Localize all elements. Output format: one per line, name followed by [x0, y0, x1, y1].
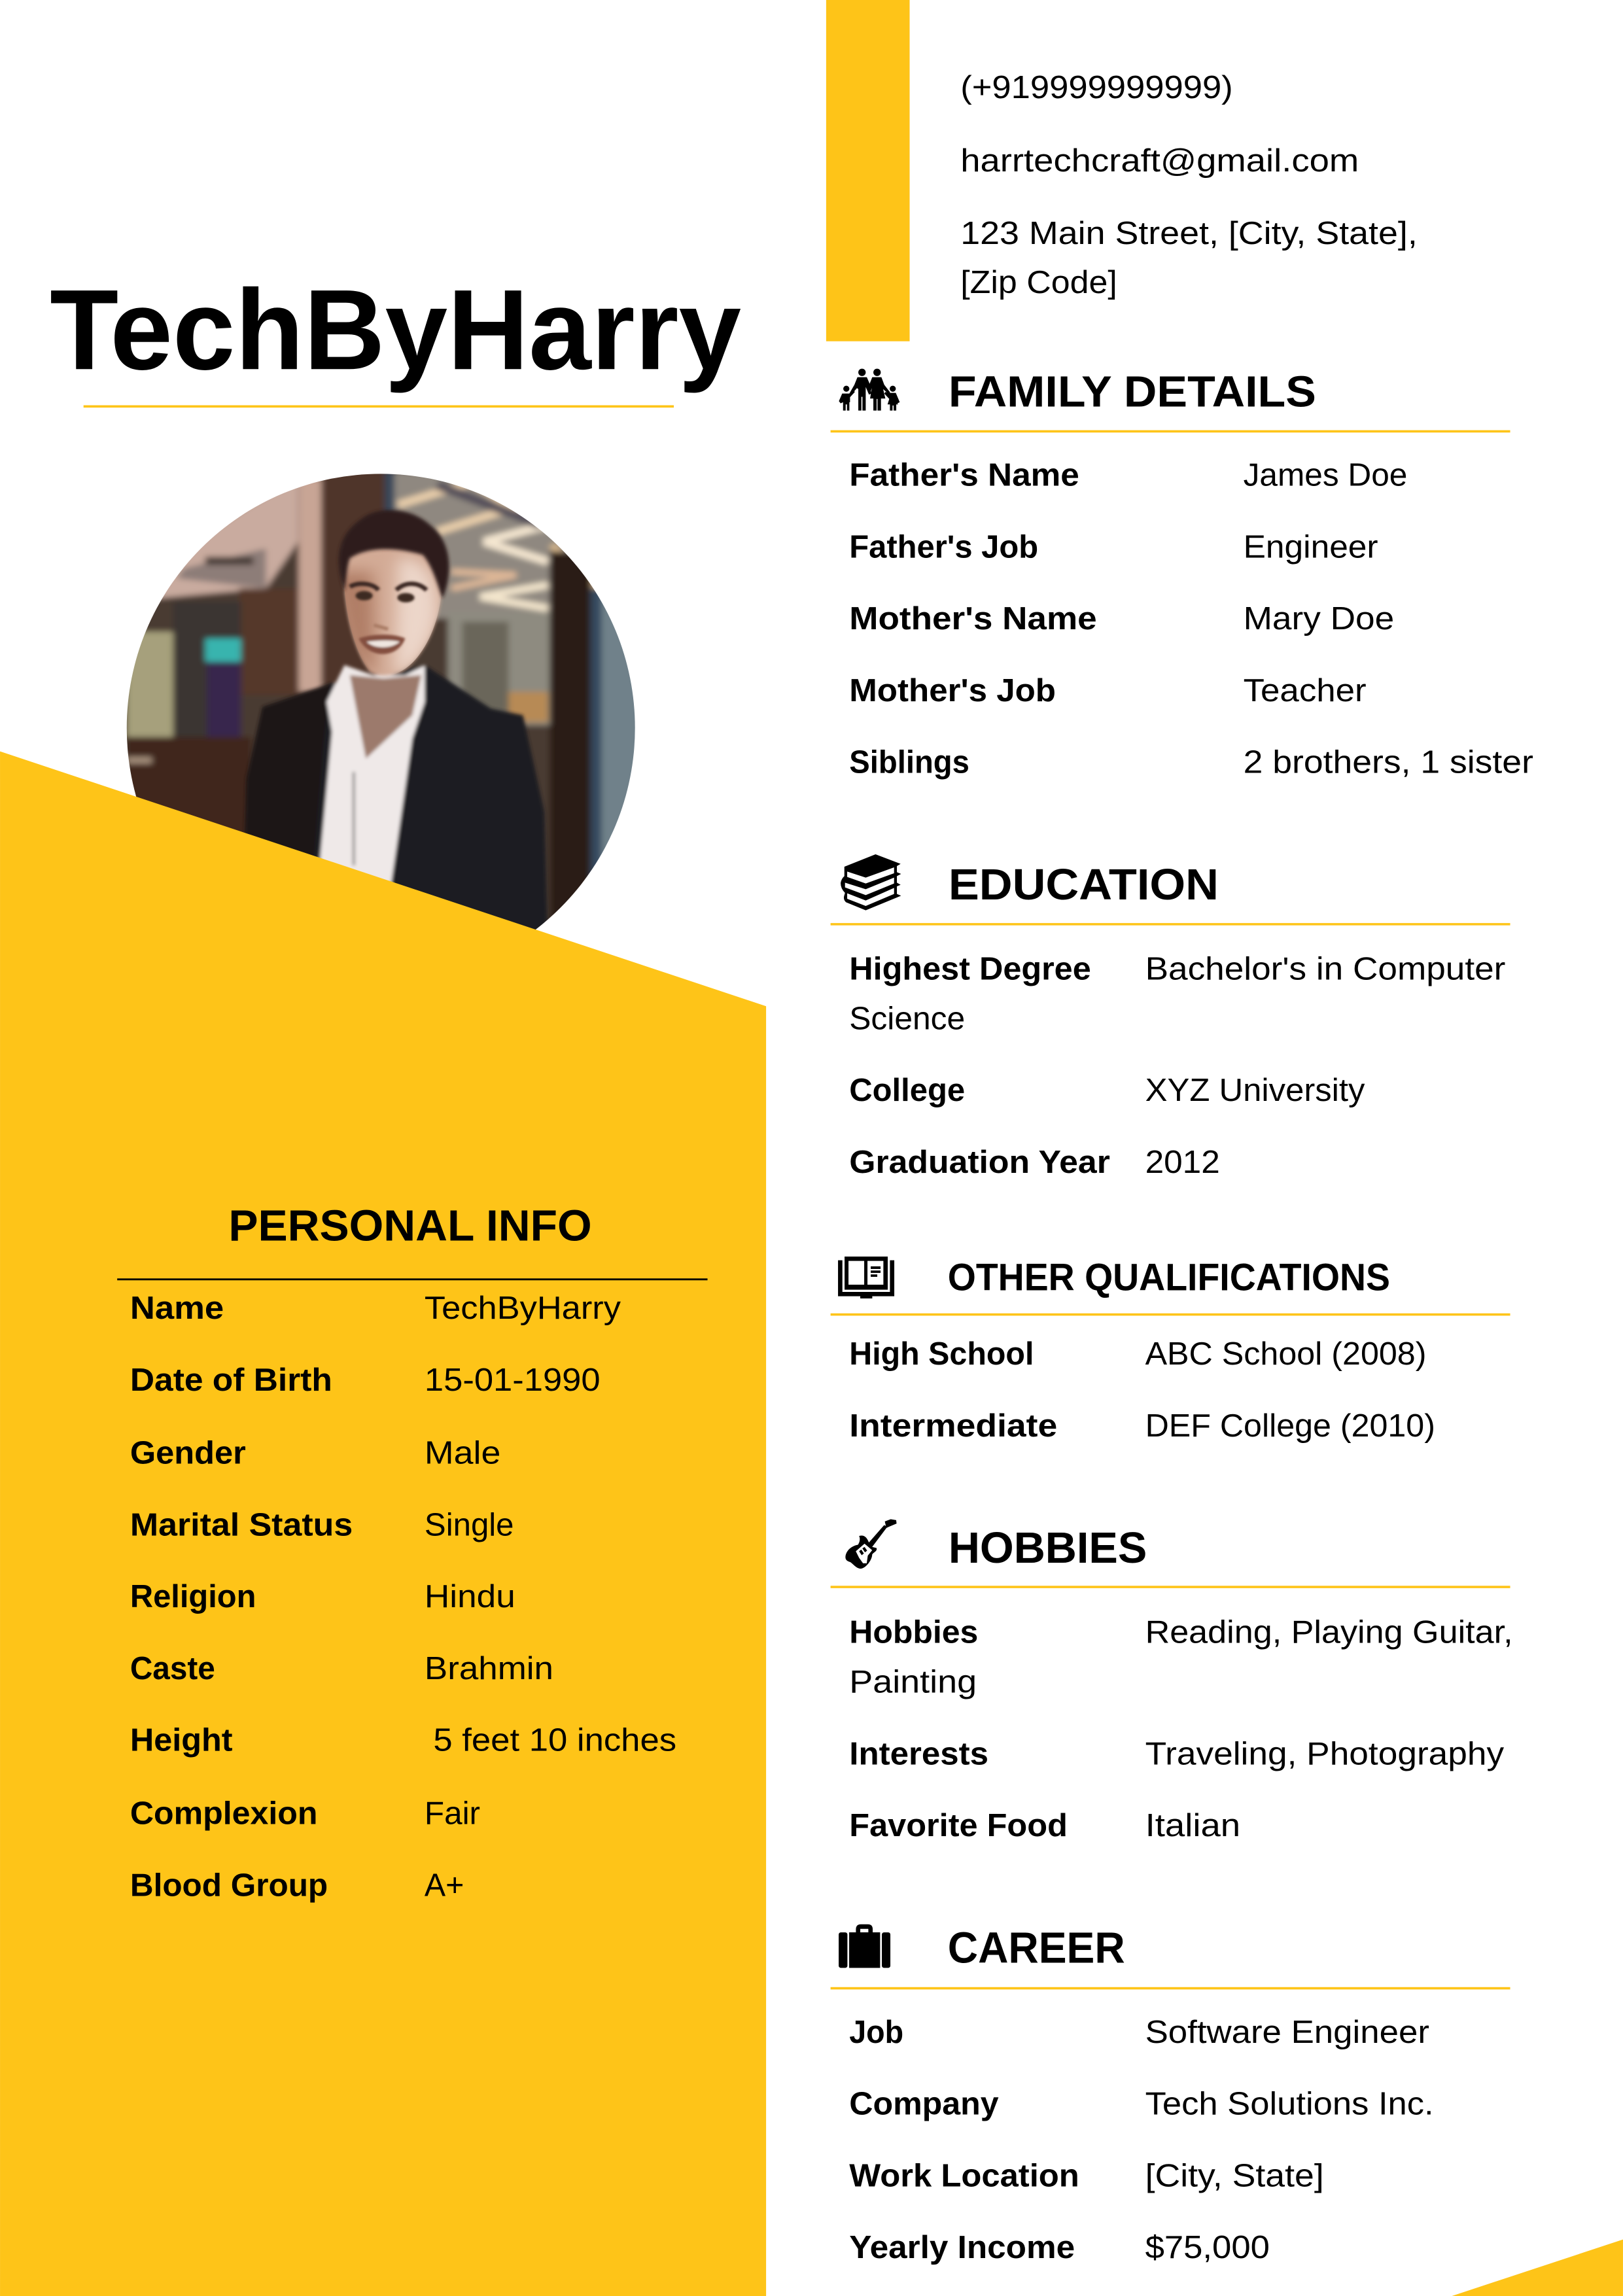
personal info rows: Name: [130, 1290, 224, 1326]
facial features: [350, 583, 427, 654]
icon: guitar: [845, 1520, 897, 1569]
qualification rows: ABC School (2008): [1145, 1336, 1426, 1372]
personal info rows: Gender: [130, 1435, 246, 1471]
personal info rows: Blood Group: [130, 1867, 328, 1903]
career rows: $75,000: [1145, 2229, 1270, 2265]
personal info rows: Height: [130, 1722, 233, 1758]
shirt: [319, 665, 425, 886]
contact details: [960, 69, 1418, 300]
panel: family details: [831, 367, 1533, 780]
profile photo: [120, 465, 648, 945]
career rows: Work Location: [849, 2157, 1079, 2193]
career rows: [849, 2014, 1434, 2265]
icon: suitcase: [839, 1924, 890, 1968]
education rows: Highest Degree: [849, 950, 1091, 986]
panel: other qualifications: [831, 1257, 1510, 1444]
personal info rows: Brahmin: [425, 1650, 553, 1686]
career rows: Yearly Income: [849, 2229, 1075, 2265]
contact details: (+919999999999): [960, 69, 1233, 105]
qualification rows: [849, 1336, 1435, 1444]
hobbies rows: [849, 1614, 1513, 1843]
education rows: Graduation Year: [849, 1144, 1110, 1180]
education rows: College: [849, 1072, 965, 1108]
icon: books: [841, 854, 901, 911]
hobbies rows: Hobbies: [849, 1614, 978, 1650]
panel: education: [831, 854, 1510, 1180]
title: TechByHarry: [50, 266, 741, 394]
personal info rows: Religion: [130, 1578, 256, 1614]
contact accent bar: [826, 0, 910, 341]
face base: [343, 545, 442, 676]
hobbies rows: Favorite Food: [849, 1807, 1068, 1843]
personal info rows: Marital Status: [130, 1506, 353, 1542]
hobbies rows: Traveling, Photography: [1145, 1735, 1505, 1771]
heading: career: CAREER: [948, 1923, 1125, 1972]
personal info rows: Fair: [425, 1796, 480, 1832]
jacket: [243, 665, 548, 945]
hobbies rows: Italian: [1145, 1807, 1240, 1843]
hobbies rows: Reading, Playing Guitar,: [1145, 1614, 1513, 1650]
family details rows: Mother's Name: [849, 600, 1097, 636]
personal info rows: 15-01-1990: [425, 1362, 601, 1398]
face shading: [334, 558, 438, 675]
icon: family: [839, 369, 899, 411]
panel: hobbies: [831, 1520, 1513, 1843]
family details rows: James Doe: [1244, 457, 1407, 493]
family details rows: Mother's Job: [849, 672, 1056, 708]
career rows: [City, State]: [1145, 2157, 1324, 2193]
contact details: harrtechcraft@gmail.com: [960, 143, 1359, 179]
family details rows: Father's Job: [849, 529, 1038, 565]
family details rows: Father's Name: [849, 457, 1079, 493]
personal info rows: Complexion: [130, 1796, 317, 1832]
heading: personal info: PERSONAL INFO: [228, 1202, 592, 1251]
hobbies rows: Interests: [849, 1735, 988, 1771]
personal info rows: TechByHarry: [425, 1290, 621, 1326]
personal info rows: A+: [425, 1867, 464, 1903]
contact details: [Zip Code]: [960, 264, 1117, 300]
panel: career: [831, 1923, 1510, 2265]
education rows: [849, 950, 1505, 1180]
contact details: 123 Main Street, [City, State],: [960, 215, 1418, 251]
family details rows: [849, 457, 1533, 780]
career rows: Tech Solutions Inc.: [1145, 2086, 1434, 2122]
qualification rows: DEF College (2010): [1145, 1408, 1435, 1444]
hair: [339, 510, 449, 599]
family details rows: Mary Doe: [1244, 600, 1394, 636]
family details rows: Teacher: [1244, 672, 1367, 708]
personal info rows: Single: [425, 1506, 514, 1542]
panel: personal info: [117, 1202, 708, 1903]
heading: hobbies: HOBBIES: [949, 1523, 1147, 1573]
hobbies rows: Painting: [849, 1664, 977, 1700]
personal info rows: 5 feet 10 inches: [433, 1722, 676, 1758]
yellow slanted panel: [0, 752, 766, 2296]
career rows: Job: [849, 2014, 903, 2050]
education rows: Bachelor's in Computer: [1145, 950, 1505, 986]
education rows: 2012: [1145, 1144, 1220, 1180]
heading: other qualifications: OTHER QUALIFICATIONS: [948, 1257, 1390, 1299]
career rows: Company: [849, 2086, 999, 2122]
career rows: Software Engineer: [1145, 2014, 1429, 2050]
personal info rows: Date of Birth: [130, 1362, 332, 1398]
personal info rows: Hindu: [425, 1578, 515, 1614]
qualification rows: High School: [849, 1336, 1034, 1372]
heading: education: EDUCATION: [949, 860, 1219, 909]
heading: family details: FAMILY DETAILS: [949, 367, 1316, 416]
family details rows: Siblings: [849, 744, 969, 780]
personal info rows: Male: [425, 1435, 500, 1471]
qualification rows: Intermediate: [849, 1408, 1057, 1444]
icon: open book: [838, 1257, 894, 1298]
education rows: XYZ University: [1145, 1072, 1365, 1108]
family details rows: Engineer: [1244, 529, 1378, 565]
personal info rows: [130, 1290, 676, 1903]
family details rows: 2 brothers, 1 sister: [1244, 744, 1533, 780]
personal info rows: Caste: [130, 1650, 215, 1686]
education rows: Science: [849, 1000, 965, 1036]
corner accent triangle: [1450, 2240, 1623, 2296]
